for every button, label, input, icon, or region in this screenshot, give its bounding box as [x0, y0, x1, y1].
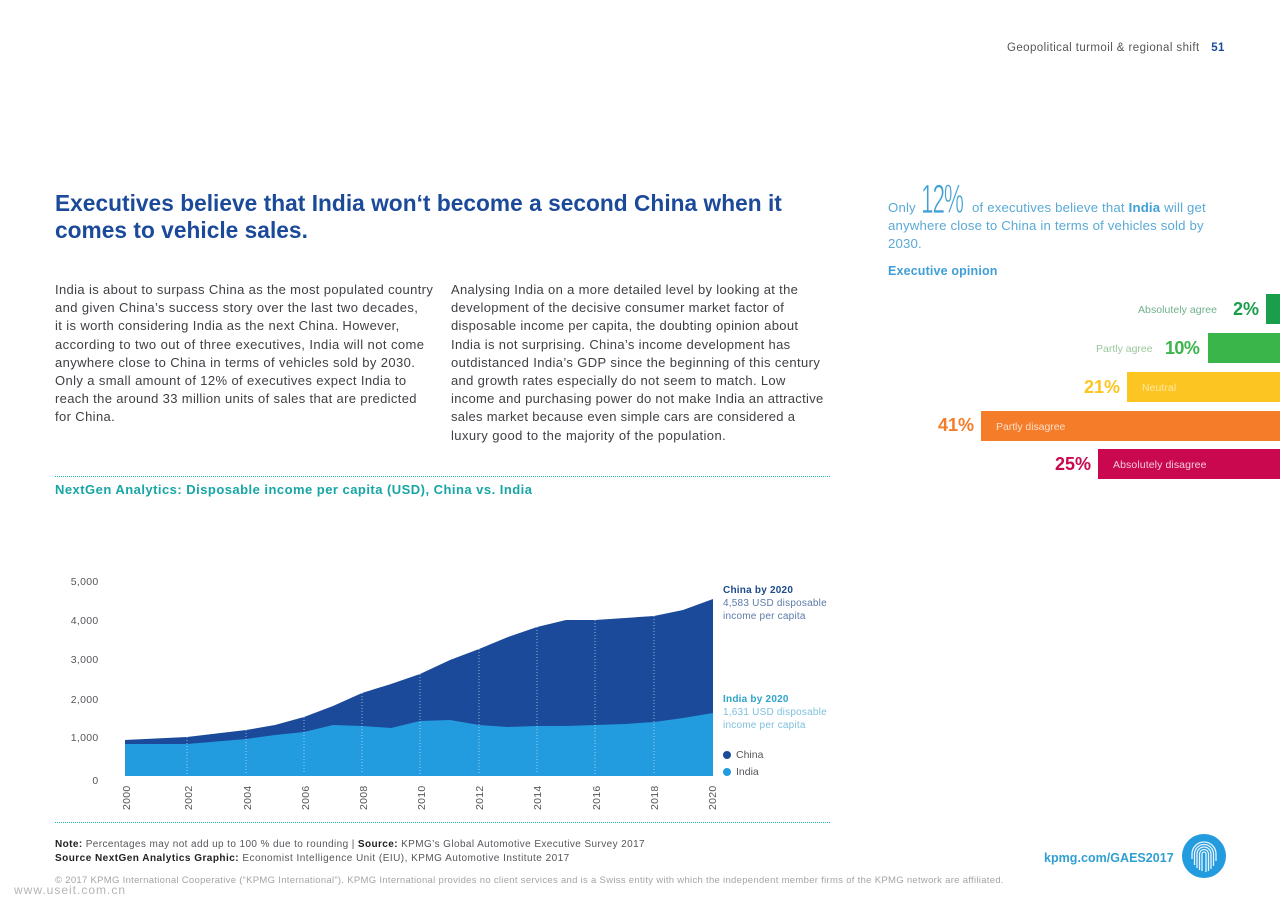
x axis labels: 2014	[532, 785, 544, 810]
text block: right column: income and purchasing power do not make India an attractive	[451, 391, 824, 406]
callout: China by 2020	[723, 585, 827, 622]
page header: Geopolitical turmoil & regional shift 51	[1007, 42, 1225, 54]
y axis labels: 0	[92, 775, 98, 787]
area: China	[125, 599, 713, 776]
text block: right column: India is not surprising. China’s income development has	[451, 337, 790, 352]
text block: left column: reach the around 33 million units of sales that are predicted	[55, 391, 417, 406]
bar: absolutely agree: Absolutely agree	[1138, 304, 1217, 316]
text block: left column: it is worth considering India as the next China. However,	[55, 318, 400, 333]
x axis labels: 2018	[649, 785, 661, 810]
note and sources	[55, 839, 645, 864]
y axis labels: 2,000	[71, 694, 98, 706]
callout: India by 2020: income per capita	[723, 720, 806, 730]
callout: India by 2020: India by 2020	[723, 694, 789, 704]
heading: executive opinion: Executive opinion	[888, 264, 998, 278]
callout: 12% statement: of executives believe that India will get	[972, 200, 1206, 215]
bar: partly disagree: 41%	[938, 415, 974, 435]
watermark: www.useit.com.cn	[14, 883, 126, 897]
bar: absolutely agree: 2%	[1233, 298, 1259, 318]
bar: absolutely disagree: Absolutely disagree	[1113, 459, 1207, 471]
y axis labels	[71, 576, 98, 787]
icon: fingerprint	[1182, 834, 1226, 878]
text block: left column: and given China’s success story over the last two decades,	[55, 300, 418, 315]
title: comes to vehicle sales.	[55, 217, 308, 243]
text block: right column: outdistanced India’s GDP since the beginning of this century	[451, 355, 820, 370]
y axis labels: 1,000	[71, 732, 98, 744]
legend: China	[736, 749, 763, 761]
area chart	[71, 576, 719, 810]
x axis labels: 2000	[121, 785, 133, 810]
x axis labels: 2010	[416, 785, 428, 810]
text block: right column: Analysing India on a more detailed level by looking at the	[451, 282, 798, 297]
bar: partly agree: 10%	[1165, 338, 1199, 358]
text block: right column: sales market because even simple cars are considered a	[451, 409, 795, 424]
x axis labels	[121, 785, 719, 810]
y axis labels: 3,000	[71, 654, 98, 666]
text block: right column: development of the decisive consumer market factor of	[451, 300, 784, 315]
text block: left column: Only a small amount of 12% of executives expect India to	[55, 373, 407, 388]
callout: 12% statement	[888, 176, 1206, 251]
bar: absolutely disagree	[1055, 449, 1280, 479]
bar: neutral: 21%	[1084, 376, 1120, 396]
bar: absolutely disagree: 25%	[1055, 454, 1091, 474]
text block: right column: luxury good to the majority of the population.	[451, 428, 726, 443]
x axis labels: 2006	[300, 785, 312, 810]
x axis labels: 2016	[591, 785, 603, 810]
text block: right column: disposable income per capita, the doubting opinion about	[451, 318, 798, 333]
text block: left column: India is about to surpass China as the most populated country	[55, 282, 433, 297]
bar: partly agree: Partly agree	[1096, 343, 1153, 355]
bar chart: executive opinion	[938, 294, 1280, 479]
x axis labels: 2008	[358, 785, 370, 810]
callout: 12% statement: Only	[888, 200, 916, 215]
bar: partly disagree: Partly disagree	[996, 420, 1065, 432]
legend: India	[736, 766, 759, 778]
title: Executives believe that India won‘t become a second China when it	[55, 190, 782, 216]
chart heading: NextGen Analytics: Disposable income per capita (USD), China vs. India	[55, 482, 532, 497]
text block: right column: and growth rates especially do not seem to match. Low	[451, 373, 786, 388]
bar: partly disagree	[938, 411, 1280, 441]
x axis labels: 2002	[183, 785, 195, 810]
bar: neutral	[1084, 372, 1280, 402]
legend	[723, 749, 764, 778]
text block: right column	[451, 282, 824, 443]
copyright: © 2017 KPMG International Cooperative (“KPMG International”). KPMG International provides no client services and is a Swiss entity with which the independent member firms of the KPMG network are affiliated.	[55, 875, 1004, 886]
callout: China by 2020: China by 2020	[723, 585, 793, 596]
note and sources: Note: Percentages may not add up to 100 % due to rounding | Source: KPMG’s Global Automotive Executive Survey 2017	[55, 839, 645, 850]
callout: India by 2020: 1,631 USD disposable	[723, 706, 827, 718]
y axis labels: 4,000	[71, 615, 98, 627]
title	[55, 190, 782, 243]
note and sources: Source NextGen Analytics Graphic: Economist Intelligence Unit (EIU), KPMG Automotive Institute 2017	[55, 853, 570, 864]
text block: left column: for China.	[55, 409, 115, 424]
text block: left column: according to two out of three executives, India will not come	[55, 337, 424, 352]
big number: 12%	[921, 176, 963, 222]
x axis labels: 2012	[474, 785, 486, 810]
y axis labels: 5,000	[71, 576, 98, 588]
x axis labels: 2020	[707, 785, 719, 810]
text block: left column	[55, 282, 433, 424]
callout: China by 2020: income per capita	[723, 611, 806, 622]
bar: partly agree	[1096, 333, 1280, 363]
link: kpmg.com/GAES2017	[1044, 851, 1174, 865]
callout: China by 2020: 4,583 USD disposable	[723, 598, 827, 609]
callout: 12% statement: anywhere close to China in terms of vehicles sold by	[888, 218, 1204, 233]
bar: absolutely agree	[1138, 294, 1280, 324]
area: India	[125, 713, 713, 776]
bar: neutral: Neutral	[1142, 382, 1176, 394]
callout: India by 2020	[723, 694, 827, 730]
x axis labels: 2004	[242, 785, 254, 810]
callout: 12% statement: 2030.	[888, 236, 922, 251]
text block: left column: anywhere close to China in terms of vehicles sold by 2030.	[55, 355, 415, 370]
